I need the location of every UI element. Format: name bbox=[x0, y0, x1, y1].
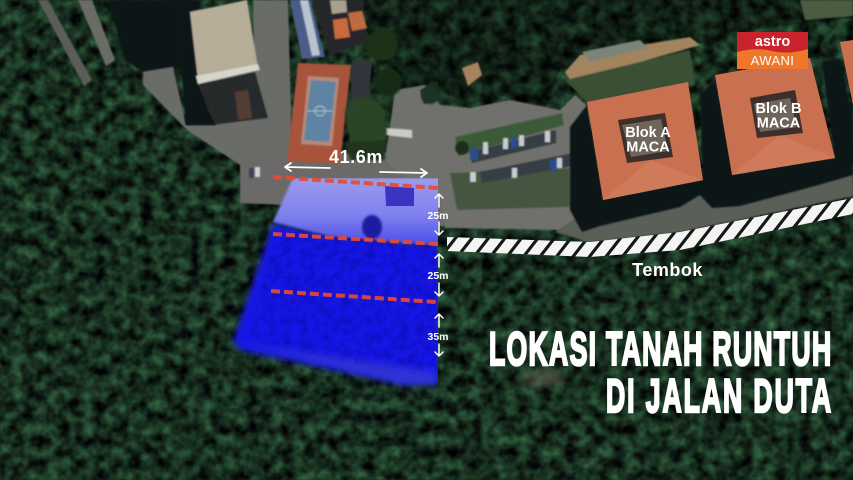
parked cars bbox=[249, 130, 578, 183]
depth values: 35m bbox=[427, 331, 449, 343]
west yard bbox=[143, 0, 292, 205]
wall hatch band bbox=[447, 198, 853, 257]
title: LOKASI TANAH RUNTUH bbox=[489, 323, 831, 376]
silver covered roof and small orange roofs bbox=[290, 0, 372, 112]
depth values: 25m bbox=[427, 210, 449, 222]
junction and car park ground bbox=[385, 85, 592, 232]
main road bbox=[240, 150, 447, 226]
label: Blok A MACA: Blok A bbox=[625, 125, 671, 141]
green strip bbox=[455, 113, 564, 156]
two forest tracks bbox=[38, 0, 92, 86]
label: Blok B MACA: MACA bbox=[757, 116, 801, 132]
dark tree cover north bbox=[362, 0, 853, 110]
wall label: Tembok bbox=[632, 260, 703, 280]
building west bbox=[176, 0, 268, 125]
title bbox=[489, 323, 831, 423]
label: Blok A MACA: MACA bbox=[626, 140, 670, 156]
roads and urban ground bbox=[38, 0, 853, 242]
width label 41.6m: 41.6m bbox=[329, 147, 383, 167]
bare land bbox=[565, 37, 700, 80]
logo: astro AWANI: astro bbox=[755, 34, 790, 50]
logo: astro AWANI bbox=[737, 32, 808, 69]
building: Blok B bbox=[715, 58, 835, 175]
car park island bbox=[450, 168, 570, 210]
depth labels and arrows bbox=[427, 194, 449, 356]
trees by the junction bbox=[345, 29, 439, 160]
title: DI JALAN DUTA bbox=[606, 370, 831, 423]
building: Blok A bbox=[587, 82, 703, 200]
logo: astro AWANI: AWANI bbox=[751, 53, 794, 68]
east road bbox=[555, 165, 853, 242]
sports court bbox=[287, 63, 351, 164]
label: Blok B MACA: Blok B bbox=[756, 101, 801, 117]
arrows: width bbox=[285, 163, 427, 177]
depth values bbox=[427, 210, 449, 343]
collapse area overlay bbox=[225, 178, 450, 392]
building shadows bbox=[570, 58, 853, 232]
depth values: 25m bbox=[427, 270, 449, 282]
building: partial third block bbox=[840, 40, 853, 105]
width label 41.6m bbox=[285, 147, 427, 177]
dashed measure lines bbox=[271, 177, 438, 302]
structure inside overlay bbox=[385, 186, 414, 206]
